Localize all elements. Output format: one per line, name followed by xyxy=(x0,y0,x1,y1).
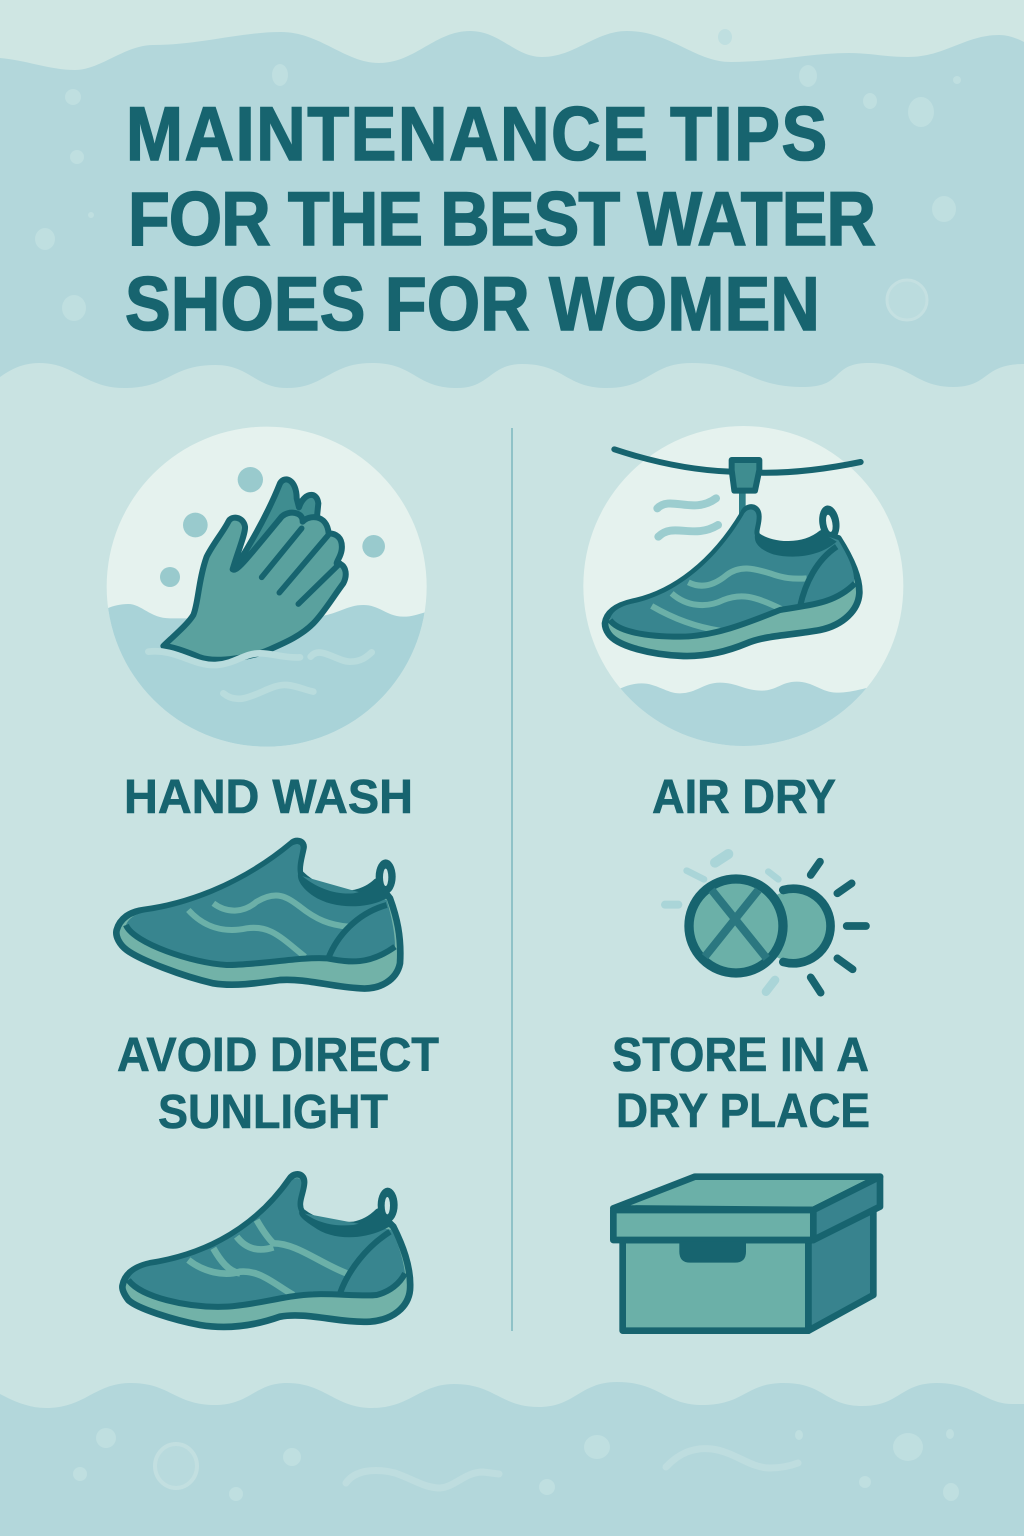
label: avoid direct sunlight: AVOID DIRECT xyxy=(117,1029,439,1082)
label: avoid direct sunlight xyxy=(117,1029,439,1139)
back hand xyxy=(235,479,318,577)
icon: sun with cross xyxy=(665,854,866,993)
icon: air dry shoe on clothesline xyxy=(583,426,903,753)
label: store in a dry place: DRY PLACE xyxy=(616,1085,870,1138)
footer wave band xyxy=(0,1382,1024,1536)
faded glare marks xyxy=(665,854,778,992)
title xyxy=(125,93,876,347)
label: store in a dry place xyxy=(612,1029,870,1138)
label: air dry: AIR DRY xyxy=(652,771,836,824)
clothes peg xyxy=(732,460,759,517)
icon: hand wash xyxy=(100,427,433,753)
air waves xyxy=(657,498,718,537)
label: store in a dry place: STORE IN A xyxy=(612,1029,869,1082)
title: FOR THE BEST WATER xyxy=(128,178,876,262)
icon: storage box xyxy=(613,1177,880,1331)
sun rays xyxy=(811,862,866,993)
front hand xyxy=(163,513,346,660)
title: SHOES FOR WOMEN xyxy=(125,263,820,347)
title: MAINTENANCE TIPS xyxy=(126,93,827,177)
label: hand wash: HAND WASH xyxy=(124,771,413,824)
icon: shoe bottom xyxy=(122,1174,410,1327)
clothesline xyxy=(614,449,861,473)
icon: shoe for avoid direct sunlight xyxy=(116,841,400,989)
shoe xyxy=(605,504,859,656)
header wave band xyxy=(0,29,1024,388)
label: avoid direct sunlight: SUNLIGHT xyxy=(158,1086,388,1139)
